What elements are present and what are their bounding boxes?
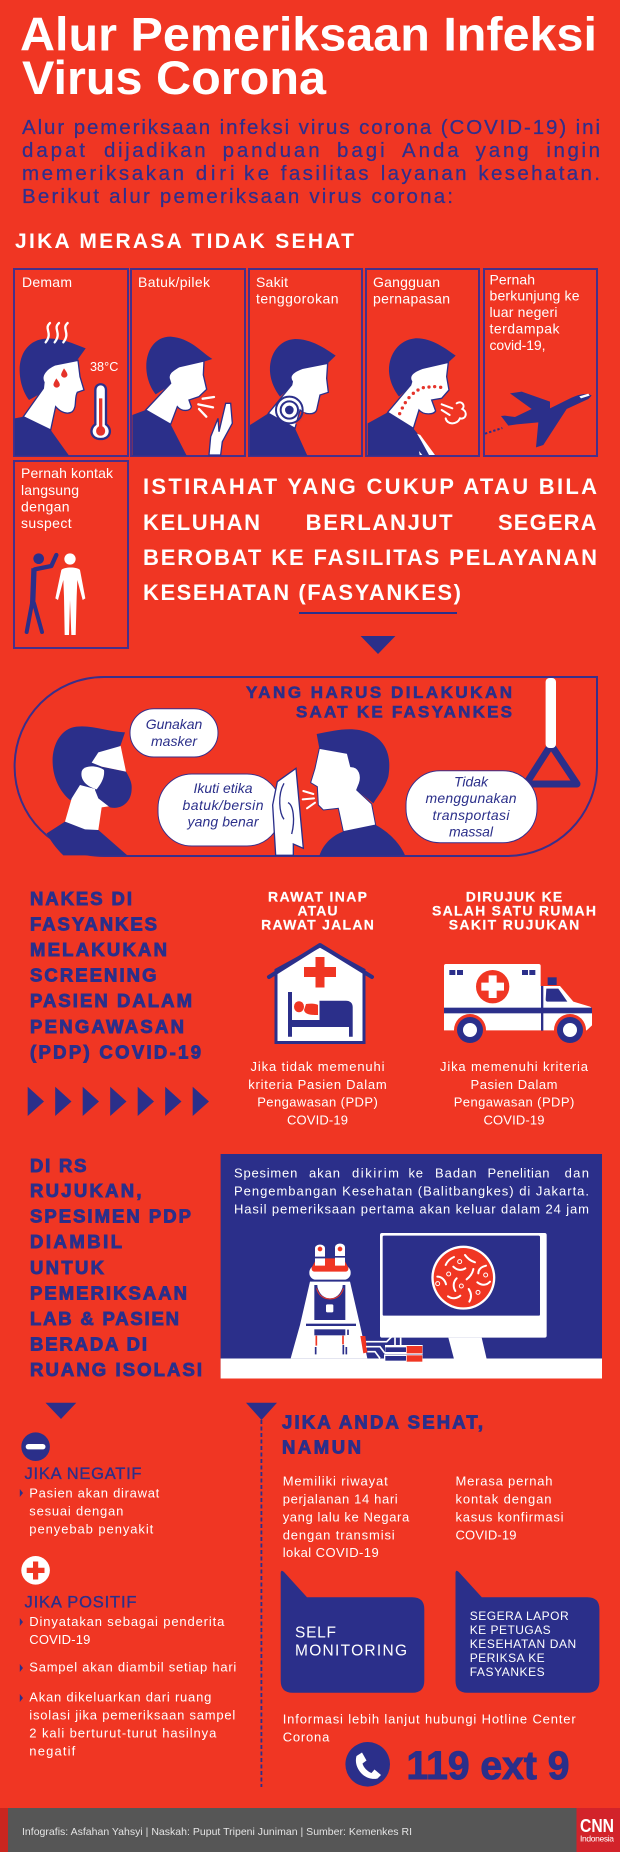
bubble: ikuti etika [158, 774, 281, 846]
heading: jika merasa tidak sehat: JIKA MERASA TIDAK SEHAT [15, 230, 354, 253]
text: Penelitian [488, 1165, 550, 1180]
bubble: gunakan masker: masker [151, 733, 198, 749]
text: riwayat: yang lalu ke Negara [283, 1510, 410, 1525]
advice text: SEGERA [498, 510, 597, 535]
text: di rs rujukan: DIAMBIL [30, 1231, 122, 1252]
text: di rs rujukan [30, 1155, 202, 1380]
text: nakes screening: MELAKUKAN [30, 939, 167, 960]
heading: NAMUN [282, 1437, 361, 1458]
section: jika positif [20, 1593, 236, 1758]
intro text: Alur pemeriksaan infeksi virus corona (COVID-19) ini [22, 116, 600, 139]
text: nakes screening: PASIEN DALAM [30, 990, 192, 1011]
text: nakes screening: FASYANKES [30, 914, 157, 935]
section: jika negatif: Pasien akan dirawat [29, 1485, 160, 1500]
icon: two people touching [27, 553, 85, 635]
section: jika negatif: sesuai dengan [29, 1503, 123, 1518]
intro text: diri [196, 162, 234, 185]
logo: cnn indonesia [580, 1816, 614, 1844]
text: Pengawasan (PDP) [454, 1095, 574, 1110]
intro text: memeriksakan [22, 162, 184, 185]
text: di rs rujukan: DI RS [30, 1155, 86, 1176]
section: jika positif: Sampel akan diambil setiap hari [29, 1660, 236, 1675]
text: hotline info [283, 1711, 576, 1744]
intro text: kesehatan. [478, 162, 600, 185]
text: di rs rujukan: RUJUKAN, [30, 1180, 142, 1201]
text: di rs rujukan: RUANG ISOLASI [30, 1359, 202, 1380]
text: Jika memenuhi kriteria [440, 1059, 589, 1074]
panel: pernah berkunjung ke luar negeri: luar negeri [490, 304, 558, 320]
figure: man with mask [47, 726, 132, 855]
heading: RAWAT INAP [268, 889, 367, 905]
icon: microscope [291, 1244, 423, 1362]
panel: pernah kontak: suspect [21, 515, 72, 531]
heading: RAWAT JALAN [261, 916, 374, 932]
text: Pengembangan Kesehatan (Balitbangkes) di Jakarta. [234, 1183, 589, 1198]
callout: segera lapor [456, 1571, 599, 1693]
section: jika negatif [20, 1465, 160, 1536]
icon: tissue in hand [273, 768, 303, 855]
figure: man with tissue [303, 729, 405, 856]
heading [282, 1412, 483, 1458]
bubble: tidak menggunakan transportasi massal: Tidak [454, 774, 489, 790]
heading: SALAH SATU RUMAH [432, 903, 596, 919]
callout: segera lapor: KE PETUGAS [470, 1623, 551, 1637]
section: jika positif: Dinyatakan sebagai penderita [29, 1614, 225, 1629]
icon: head with fever [15, 323, 118, 456]
footer [0, 1808, 620, 1852]
advice text: KESEHATAN (FASYANKES) [143, 580, 461, 605]
bubble: tidak menggunakan transportasi massal: massal [449, 824, 494, 840]
panel: sakit tenggorokan: Sakit [256, 274, 288, 290]
text: COVID-19 [484, 1113, 544, 1128]
icon: monitor [380, 1233, 547, 1359]
bubble: gunakan masker: Gunakan [146, 716, 202, 732]
icon: sore throat head [250, 339, 336, 456]
column: dirujuk [432, 889, 596, 1128]
panel: pernah berkunjung ke luar negeri: berkunjung ke [490, 288, 580, 304]
panel: demam: Demam [22, 274, 72, 290]
intro text: ke [244, 162, 269, 185]
text: COVID-19 [287, 1113, 348, 1128]
icon: house with bed [269, 945, 372, 1042]
icon: coughing head [132, 337, 232, 456]
section: jika positif: 2 kali berturut-turut hasilnya [29, 1725, 217, 1740]
intro text: Anda [402, 139, 459, 162]
bubble: tidak menggunakan transportasi massal: transportasi [432, 807, 510, 823]
section: jika positif: isolasi jika pemeriksaan sampel [29, 1707, 235, 1722]
text: kontak: kontak dengan [456, 1492, 552, 1507]
panel: batuk/pilek [131, 269, 245, 456]
text: nakes screening: PENGAWASAN [30, 1016, 184, 1037]
panel: pernah kontak [14, 461, 128, 648]
bubble: tidak menggunakan transportasi massal: menggunakan [426, 790, 517, 806]
icon: plus [21, 1556, 50, 1585]
hotline number: 119 ext 9 [406, 1744, 570, 1788]
callout: segera lapor: PERIKSA KE [470, 1651, 545, 1665]
callout: self monitoring [281, 1571, 424, 1693]
section: jika negatif: JIKA NEGATIF [24, 1465, 142, 1483]
heading: JIKA ANDA SEHAT, [282, 1412, 483, 1433]
bubble: gunakan masker [130, 709, 218, 757]
text: Pengawasan (PDP) [257, 1095, 378, 1110]
intro text: fasilitas [281, 162, 368, 185]
panel: spesimen lab [221, 1154, 602, 1378]
section: jika negatif: penyebab penyakit [29, 1521, 154, 1536]
callout: segera lapor: SEGERA LAPOR [470, 1609, 569, 1623]
text: kriteria Pasien Dalam [248, 1077, 387, 1092]
intro text: ingin [546, 139, 600, 162]
intro text: layanan [381, 162, 466, 185]
arrow: left down [46, 1403, 76, 1419]
text: kontak: COVID-19 [456, 1527, 516, 1542]
callout: segera lapor: KESEHATAN DAN [470, 1637, 576, 1651]
logo: cnn indonesia: CNN [580, 1816, 614, 1836]
heading [246, 683, 512, 722]
heading: YANG HARUS DILAKUKAN [246, 683, 512, 702]
panel: pernah berkunjung ke luar negeri: Pernah [490, 272, 535, 288]
intro text: dapat [22, 139, 85, 162]
intro text: bagi [337, 139, 385, 162]
callout: segera lapor: FASYANKES [470, 1665, 545, 1679]
bubble: ikuti etika: yang benar [186, 814, 260, 830]
panel: pernah kontak: dengan [21, 499, 70, 515]
intro text: Berikut alur pemeriksaan virus corona: [22, 185, 453, 208]
icon: minus [21, 1432, 50, 1461]
text [440, 1059, 589, 1128]
panel: pernah berkunjung ke luar negeri: covid-19, [490, 337, 546, 353]
advice text: KELUHAN [143, 510, 260, 535]
text: di rs rujukan: SPESIMEN PDP [30, 1206, 191, 1227]
text: dikirim [352, 1165, 399, 1180]
text: Spesimen [234, 1165, 297, 1180]
section: jika positif: negatif [29, 1743, 76, 1758]
callout: self monitoring: SELF [295, 1624, 336, 1641]
text: riwayat: lokal COVID-19 [283, 1545, 379, 1560]
panel: yang harus dilakukan [15, 677, 597, 856]
bubble: tidak menggunakan transportasi massal [406, 771, 537, 843]
text: di rs rujukan: PEMERIKSAAN [30, 1283, 187, 1304]
text: kontak: kasus konfirmasi [456, 1510, 564, 1525]
footer: Infografis: Asfahan Yahsyi | Naskah: Puput Tripeni Juniman | Sumber: Kemenkes RI [22, 1826, 412, 1838]
heading [432, 889, 596, 932]
section: jika positif: COVID-19 [29, 1632, 90, 1647]
title: Alur Pemeriksaan Infeksi [20, 8, 597, 61]
icon: breathing difficulty head [368, 338, 466, 456]
text: Hasil pemeriksaan pertama akan keluar dalam 24 jam [234, 1201, 589, 1216]
panel: gangguan pernapasan: pernapasan [373, 290, 450, 306]
panel: gangguan pernapasan: Gangguan [373, 274, 440, 290]
text: riwayat: perjalanan 14 hari [283, 1492, 398, 1507]
panel: sakit tenggorokan: tenggorokan [256, 290, 339, 306]
heading: ATAU [298, 903, 338, 919]
text: hotline info: Informasi lebih lanjut hubungi Hotline Center [283, 1711, 576, 1726]
text: nakes screening: SCREENING [30, 965, 156, 986]
panel: demam [14, 269, 128, 456]
text: di rs rujukan: BERADA DI [30, 1334, 147, 1355]
heading: DIRUJUK KE [466, 889, 562, 905]
advice text: BEROBAT KE FASILITAS PELAYANAN [143, 545, 597, 570]
intro text: panduan [223, 139, 320, 162]
arrows: row of triangles [28, 1087, 209, 1116]
heading: SAKIT RUJUKAN [449, 916, 579, 932]
heading: SAAT KE FASYANKES [296, 703, 512, 722]
panel: pernah kontak: langsung [21, 482, 79, 498]
icon: phone [345, 1742, 390, 1787]
section: jika anda sehat [281, 1412, 599, 1788]
callout: self monitoring: MONITORING [295, 1642, 407, 1659]
panel: sakit tenggorokan [249, 269, 362, 456]
text: Badan [435, 1165, 476, 1180]
panel: pernah berkunjung ke luar negeri [484, 269, 597, 456]
bubble: ikuti etika: batuk/bersin [182, 797, 264, 813]
section: jika positif: JIKA POSITIF [24, 1593, 136, 1611]
panel: gangguan pernapasan [366, 269, 479, 456]
arrow: down [361, 636, 395, 654]
heading [261, 889, 374, 932]
text: Pasien Dalam [470, 1077, 558, 1092]
text: ke [408, 1165, 423, 1180]
title: Virus Corona [22, 51, 327, 104]
panel: pernah kontak: Pernah kontak [21, 465, 114, 481]
icon: airplane [485, 392, 592, 447]
icon: transit handle [526, 678, 577, 784]
panel: pernah berkunjung ke luar negeri: terdampak [490, 320, 560, 336]
text: nakes screening: (PDP) COVID-19 [30, 1042, 201, 1063]
column: rawat inap [248, 889, 387, 1128]
logo: cnn indonesia: Indonesia [580, 1834, 614, 1844]
intro text [22, 116, 600, 208]
text: nakes screening: NAKES DI [30, 888, 132, 909]
text: nakes screening [30, 888, 201, 1063]
bubble: ikuti etika: Ikuti etika [194, 780, 253, 796]
arrow: right down with dashed line [246, 1403, 277, 1787]
text: kontak [456, 1474, 564, 1542]
text [248, 1059, 387, 1128]
icon: ambulance [444, 964, 592, 1046]
text: riwayat [283, 1474, 410, 1560]
text: akan [309, 1165, 340, 1180]
advice text [143, 474, 597, 605]
advice text: BERLANJUT [306, 510, 453, 535]
icon: head with fever: 38°C [90, 360, 118, 374]
panel: batuk/pilek: Batuk/pilek [138, 274, 211, 290]
text: di rs rujukan: LAB & PASIEN [30, 1308, 179, 1329]
text: riwayat: dengan transmisi [283, 1527, 395, 1542]
text: Jika tidak memenuhi [250, 1059, 385, 1074]
section: jika positif: Akan dikeluarkan dari ruang [29, 1690, 211, 1705]
intro text: yang [476, 139, 529, 162]
text: dan [565, 1165, 589, 1180]
text: riwayat: Memiliki riwayat [283, 1474, 388, 1489]
text [234, 1165, 589, 1216]
advice text: ISTIRAHAT YANG CUKUP ATAU BILA [143, 474, 597, 499]
text: kontak: Merasa pernah [456, 1474, 552, 1489]
intro text: dijadikan [104, 139, 206, 162]
title [20, 8, 597, 104]
text: di rs rujukan: UNTUK [30, 1257, 105, 1278]
text: hotline info: Corona [283, 1729, 330, 1744]
